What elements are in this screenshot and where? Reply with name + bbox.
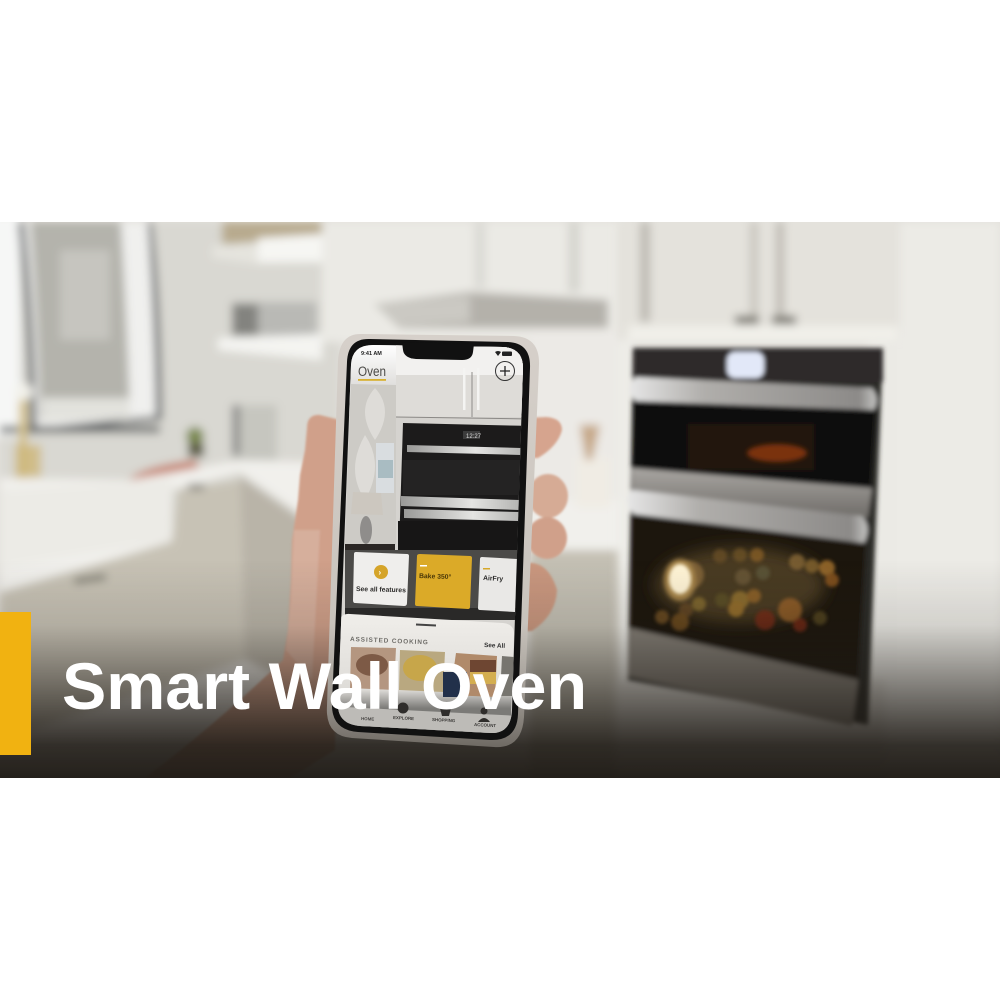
app sheet: assisted cooking: ASSISTED COOKING	[350, 636, 429, 646]
tab bar	[338, 702, 512, 733]
upper oven handle	[630, 377, 877, 410]
lower oven handle	[627, 490, 868, 543]
food thumbnails	[350, 647, 514, 697]
oven glow	[747, 444, 807, 462]
feature card: see all features: ›	[378, 568, 382, 577]
lower door panel	[628, 628, 858, 726]
wall behind sink	[4, 226, 336, 476]
yellow accent bar	[0, 612, 31, 755]
feature card: airfry	[478, 557, 517, 612]
counter	[0, 460, 310, 596]
phone notch	[402, 342, 474, 360]
upper cabinets and hood	[322, 222, 622, 342]
feature card: see all features	[353, 552, 409, 606]
bottom dark gradient overlay	[0, 560, 1000, 778]
app scene: art print and lamp	[345, 443, 395, 550]
phone	[325, 334, 539, 747]
oven light bokeh	[655, 548, 839, 632]
app scene: kitchen wall	[338, 345, 523, 733]
status bar	[361, 351, 512, 357]
app sheet: assisted cooking: See All	[484, 642, 505, 650]
counter behind phone	[564, 527, 618, 551]
feature card: airfry: AirFry	[483, 575, 503, 583]
add button	[496, 362, 514, 380]
app scene: wall oven	[345, 423, 532, 620]
app scene: wallpaper	[345, 384, 396, 550]
app scene: cabinet doors	[396, 345, 531, 419]
tab bar: EXPLORE	[393, 715, 414, 721]
window	[0, 215, 162, 437]
ring finger	[527, 517, 567, 559]
app sheet: assisted cooking	[338, 614, 514, 733]
tab bar: SHOPPING	[432, 717, 456, 723]
wall oven body	[628, 348, 883, 725]
tab bar: ACCOUNT	[474, 722, 496, 728]
little finger	[525, 563, 557, 631]
title: Smart Wall Oven	[62, 649, 587, 723]
palm and wrist	[190, 414, 336, 746]
app heading: Oven: Oven	[358, 364, 386, 379]
feature card: see all features: See all features	[356, 586, 406, 594]
middle finger	[528, 474, 568, 518]
status bar: 9:41 AM	[361, 351, 382, 357]
feature card: bake	[415, 554, 472, 609]
phone case	[327, 334, 539, 747]
plant and towel	[186, 427, 204, 445]
feature card: bake: Bake 350°	[419, 572, 452, 581]
shelves	[222, 222, 322, 244]
faucet	[15, 383, 41, 478]
top finger	[535, 416, 564, 460]
lower oven door window	[630, 516, 866, 680]
oven cabinet surround	[734, 312, 796, 320]
tab bar: HOME	[361, 716, 374, 722]
phone bezel	[332, 339, 530, 740]
lower cabinets	[0, 480, 245, 740]
background photo: blurred kitchen	[0, 215, 1000, 780]
metal band	[632, 468, 872, 518]
app scene: wall oven: 12:27	[466, 434, 482, 440]
oven display	[727, 352, 764, 378]
hand holding phone	[190, 414, 570, 746]
upper oven door	[632, 400, 876, 490]
